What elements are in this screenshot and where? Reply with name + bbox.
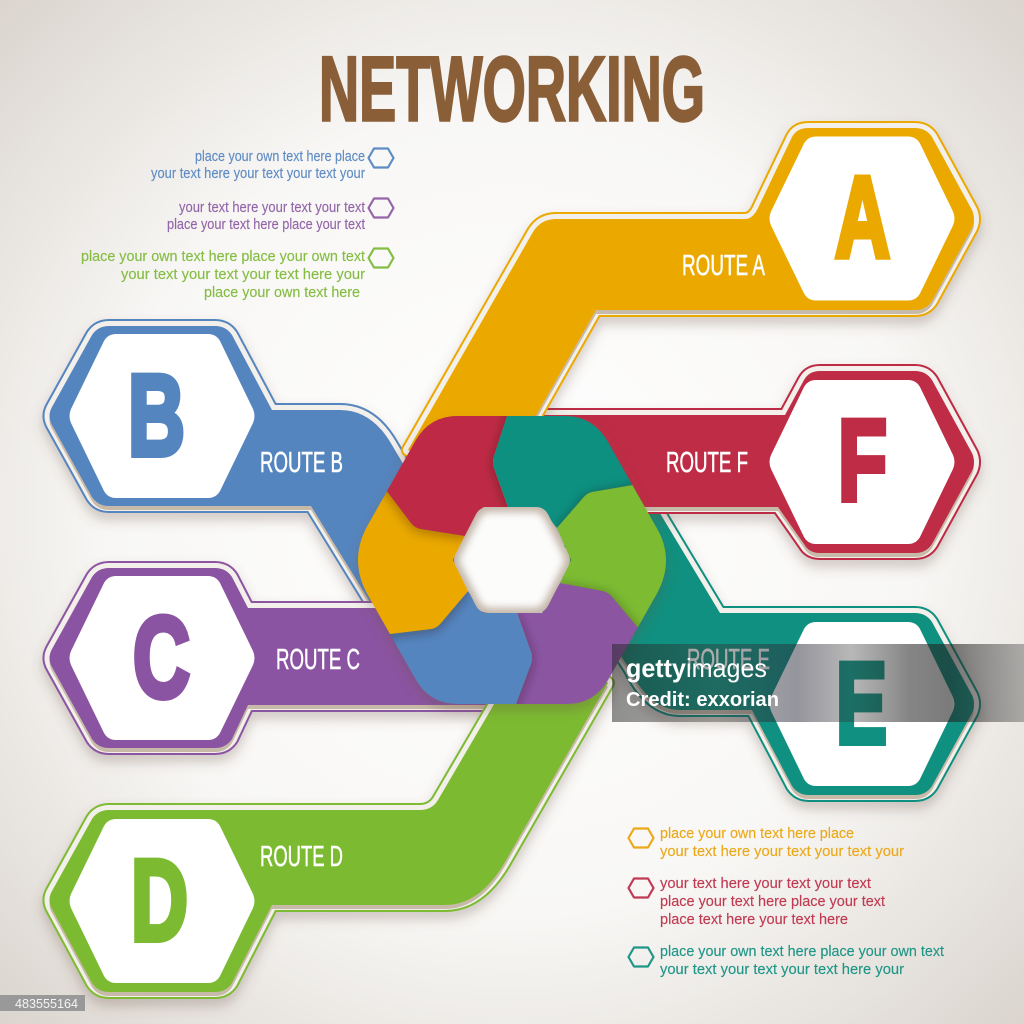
route C arm: ROUTE C [276,644,360,676]
route B arm: ROUTE B [260,447,343,479]
watermark band [612,644,1024,722]
center hexagon hub [354,416,668,716]
note: green: place your own text here place your own text [81,248,366,265]
legend: bottom right notes [628,825,945,978]
route B arm [50,326,460,614]
route D arm: ROUTE D [260,841,343,873]
note: purple: place your text here place your text [167,216,366,233]
route E arm [560,480,974,799]
note: blue: place your own text here place [195,148,365,165]
segment: purple [516,580,640,715]
note: green: place your own text here [204,284,360,301]
title: NETWORKING [319,38,705,140]
note: blue: your text here your text your text your [151,165,365,182]
note: red: place text here your text here [660,911,848,928]
note: teal: your text your text your text here your [660,961,904,978]
route E arm: ROUTE E [687,644,770,676]
note: purple [167,198,394,233]
note: orange [628,825,904,860]
note: blue [151,148,394,182]
note: purple: your text here your text your text [179,199,366,216]
route F arm: F [838,397,887,525]
note: green [81,248,394,301]
route E arm: E [836,640,887,768]
center hole [454,507,570,613]
segment: red overlap [380,416,485,544]
route F arm: ROUTE F [666,447,748,479]
segment: blue [390,591,538,716]
image id tag [0,995,85,1011]
watermark band: Credit: exxorian [626,689,779,711]
note: red: place your text here place your text [660,893,886,910]
route A arm [408,128,974,474]
route A arm: A [835,154,890,282]
route D arm: D [131,837,188,965]
note: orange: place your own text here place [660,825,854,842]
route C arm [50,568,500,752]
route D arm [50,640,608,996]
note: teal [628,943,945,978]
note: orange: your text here your text your text your [660,843,904,860]
route C arm: C [133,594,190,722]
note: red: your text here your text your text [660,875,872,892]
note: green: your text your text your text here your [121,266,365,283]
segment: green [554,481,668,632]
route F arm [520,371,974,557]
note: teal: place your own text here place your own text [660,943,945,960]
segment: teal [486,416,633,537]
image id tag: 483555164 [15,997,78,1011]
segment: orange [354,491,472,644]
note: red [628,875,886,928]
route B arm: B [128,352,185,480]
route A arm: ROUTE A [682,250,765,282]
legend: top left notes [81,148,394,301]
segment: red [387,416,508,536]
watermark band: gettyimages [626,653,767,683]
